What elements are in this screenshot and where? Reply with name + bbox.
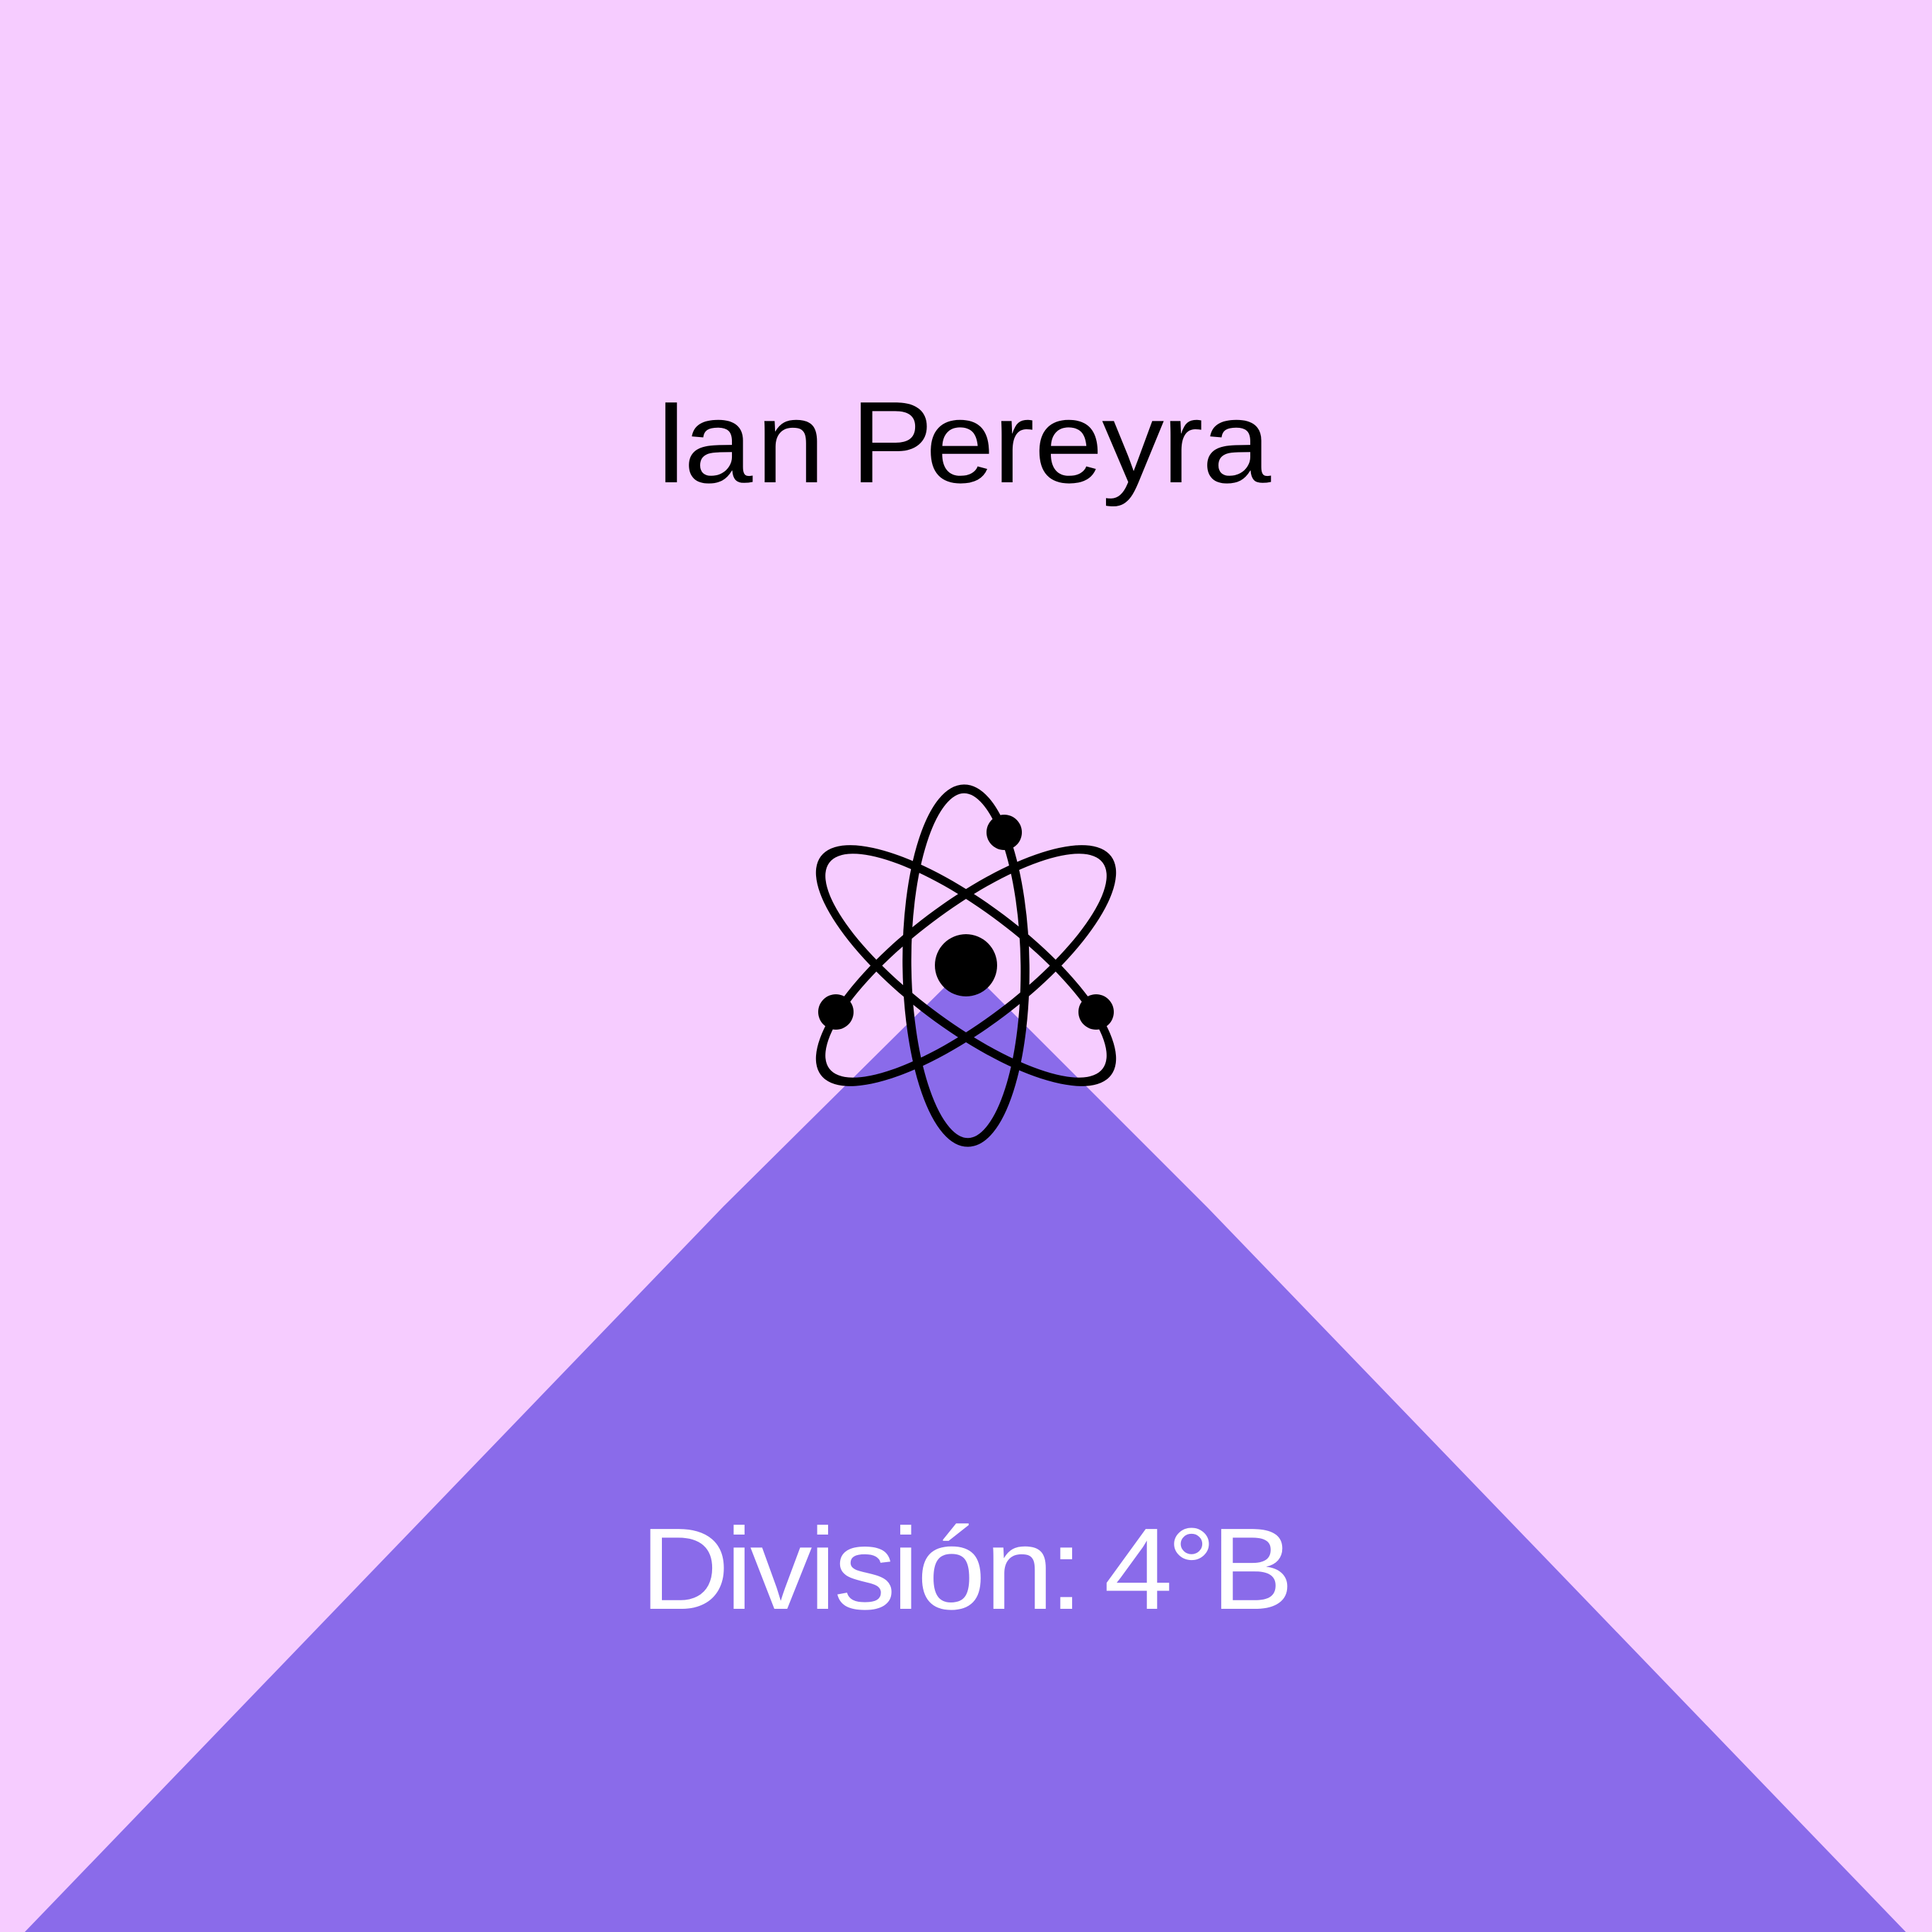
purple triangle <box>25 966 1906 1932</box>
subtitle: class division: División: 4°B <box>640 1503 1294 1634</box>
orbit tilted left <box>783 805 1149 1126</box>
electron left <box>818 994 854 1030</box>
icon: atom <box>783 788 1149 1143</box>
electron right <box>1078 994 1114 1030</box>
vertical orbit <box>905 788 1027 1143</box>
electron top <box>987 815 1022 850</box>
orbit tilted right <box>783 805 1149 1126</box>
title: student name: Ian Pereyra <box>654 377 1271 507</box>
nucleus <box>935 934 997 996</box>
